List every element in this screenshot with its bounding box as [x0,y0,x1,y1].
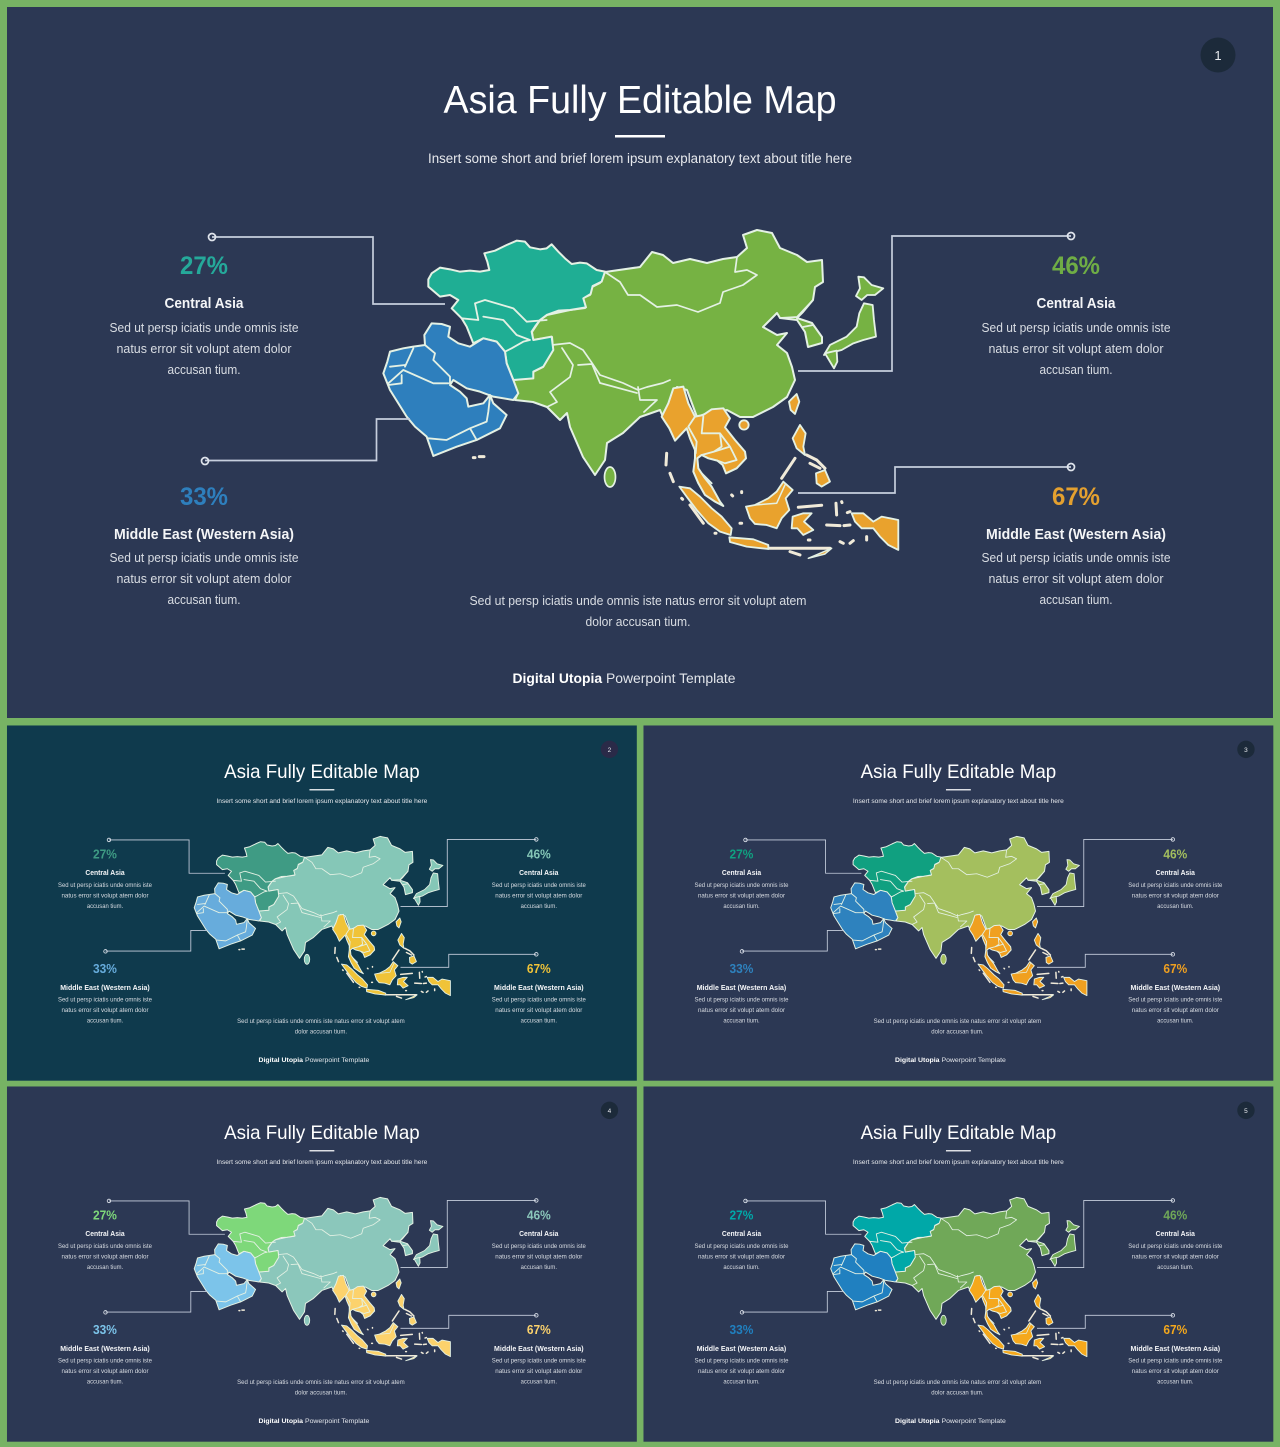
title: Asia Fully Editable Map [224,1123,420,1144]
slide number badge 1: 1 [1214,48,1222,63]
subtitle: Insert some short and brief lorem ipsum explanatory text about title here [853,1159,1064,1166]
bottom note [237,1379,405,1396]
block: Central Asia 27% [694,1208,789,1271]
block: Central Asia 46% [982,252,1170,377]
block: Central Asia 27%: accusan tium. [723,1264,760,1271]
slide number badge 2 [601,741,618,758]
block: Central Asia 27%: Central Asia [722,1229,762,1238]
block: Middle East 67%: accusan tium. [521,1378,557,1385]
block: Central Asia 46%: Central Asia [1156,1229,1196,1238]
block: Middle East 67%: 67% [527,1323,551,1337]
callout lines [104,838,538,967]
block: Middle East 33%: Sed ut persp iciatis unde omnis iste [58,997,152,1004]
block: Central Asia 27%: 27% [180,252,228,280]
block: Middle East 67% [1128,1323,1223,1385]
block: Central Asia 27%: Sed ut persp iciatis unde omnis iste [58,882,152,889]
slide number badge 3 [1237,741,1255,758]
block: Central Asia 46%: natus error sit volupt atem dolor [495,1254,583,1261]
callout line: bottom right [798,464,1074,493]
block: Middle East 33%: Sed ut persp iciatis unde omnis iste [58,1358,152,1365]
block: Central Asia 46%: Central Asia [519,1229,559,1238]
block: Central Asia 46%: 46% [1163,1208,1187,1222]
block: Central Asia 27%: natus error sit volupt atem dolor [116,341,292,356]
subtitle: Insert some short and brief lorem ipsum explanatory text about title here [216,1159,428,1166]
bottom note [470,593,806,629]
subtitle: Insert some short and brief lorem ipsum explanatory text about title here [853,798,1064,805]
title: Asia Fully Editable Map [444,79,836,122]
block: Middle East 33%: Middle East (Western Asia) [60,983,150,992]
block: Middle East 67%: 67% [1163,962,1187,976]
block: Central Asia 27%: natus error sit volupt atem dolor [698,893,786,900]
block: Central Asia 46%: accusan tium. [1157,1264,1194,1271]
block: Central Asia 46%: Sed ut persp iciatis unde omnis iste [492,882,586,889]
block: Central Asia 46%: natus error sit volupt atem dolor [988,341,1164,356]
block: Central Asia 27%: 27% [93,1208,117,1222]
block: Central Asia 46%: Sed ut persp iciatis unde omnis iste [982,320,1170,335]
block: Middle East 33%: natus error sit volupt atem dolor [698,1007,786,1014]
block: Middle East 33% [694,1323,789,1385]
block: Middle East 33%: Sed ut persp iciatis unde omnis iste [694,1358,789,1365]
callout line: top left [208,234,445,304]
block: Middle East 67%: Middle East (Western Asia) [1131,983,1221,992]
title underline [309,789,334,790]
block: Middle East 33%: natus error sit volupt atem dolor [116,571,292,586]
block: Central Asia 46%: accusan tium. [521,1264,557,1271]
footer: Digital Utopia Powerpoint Template [895,1057,1006,1064]
title: Asia Fully Editable Map [861,1123,1056,1144]
block: Central Asia 27%: Sed ut persp iciatis unde omnis iste [694,1243,789,1250]
block: Middle East 33%: Middle East (Western Asia) [114,526,294,543]
slide number badge 2: 2 [608,747,612,754]
bottom note: Sed ut persp iciatis unde omnis iste natus error sit volupt atem [874,1379,1041,1386]
title: Asia Fully Editable Map [861,762,1056,783]
block: Central Asia 46%: Sed ut persp iciatis unde omnis iste [1128,1243,1223,1250]
title underline [309,1150,334,1151]
block: Middle East 33%: accusan tium. [723,1017,760,1024]
block: Middle East 67%: natus error sit volupt atem dolor [495,1007,583,1014]
block: Central Asia 27%: accusan tium. [168,362,240,377]
block: Middle East 67%: natus error sit volupt atem dolor [988,571,1164,586]
map of Asia [383,230,898,558]
slide number badge 3: 3 [1244,747,1248,754]
block: Middle East 33%: natus error sit volupt atem dolor [61,1368,149,1375]
panel: slide 5 thumbnail [643,1086,1273,1442]
bottom note [874,1018,1041,1035]
block: Middle East 33%: accusan tium. [168,592,240,607]
block: Middle East 33%: Sed ut persp iciatis unde omnis iste [110,550,298,565]
block: Middle East 33% [58,1323,152,1385]
block: Middle East 33% [58,962,152,1024]
block: Middle East 67%: accusan tium. [1157,1378,1194,1385]
map of Asia [831,1197,1087,1361]
block: Middle East 33% [110,483,298,607]
block: Middle East 33%: Sed ut persp iciatis unde omnis iste [694,997,789,1004]
bottom note: Sed ut persp iciatis unde omnis iste natus error sit volupt atem [470,593,806,608]
footer: Digital Utopia Powerpoint Template [258,1057,370,1064]
bottom note: dolor accusan tium. [295,1389,347,1396]
title underline [946,789,971,790]
block: Middle East 67%: Sed ut persp iciatis unde omnis iste [982,550,1170,565]
block: Middle East 67%: Sed ut persp iciatis unde omnis iste [492,1358,586,1365]
block: Central Asia 46%: 46% [527,1208,551,1222]
block: Central Asia 46%: natus error sit volupt atem dolor [1132,893,1220,900]
block: Central Asia 27%: 27% [730,847,753,861]
slide number badge 4 [601,1102,618,1119]
block: Middle East 67%: accusan tium. [521,1017,557,1024]
block: Central Asia 46%: accusan tium. [1157,903,1194,910]
bottom note [874,1379,1041,1396]
block: Middle East 67%: Sed ut persp iciatis unde omnis iste [492,997,586,1004]
block: Central Asia 27%: Sed ut persp iciatis unde omnis iste [694,882,789,889]
block: Central Asia 27%: Central Asia [85,868,125,877]
block: Central Asia 46%: natus error sit volupt atem dolor [1132,1254,1220,1261]
block: Middle East 67%: Middle East (Western Asia) [986,526,1166,543]
block: Central Asia 27%: 27% [730,1208,753,1222]
block: Central Asia 46%: accusan tium. [1040,362,1112,377]
block: Central Asia 46% [1128,1208,1223,1271]
block: Central Asia 46%: 46% [527,847,551,861]
block: Central Asia 46%: natus error sit volupt atem dolor [495,893,583,900]
callout lines [740,1199,1175,1328]
block: Middle East 67%: 67% [527,962,551,976]
block: Middle East 67%: Sed ut persp iciatis unde omnis iste [1128,997,1223,1004]
map of Asia [831,836,1087,1000]
block: Central Asia 27%: accusan tium. [87,1264,123,1271]
block: Central Asia 27%: Central Asia [722,868,762,877]
block: Middle East 67% [492,962,586,1024]
subtitle: Insert some short and brief lorem ipsum explanatory text about title here [428,151,852,166]
block: Central Asia 46%: Central Asia [1156,868,1196,877]
block: Middle East 33%: accusan tium. [723,1378,760,1385]
bottom note: dolor accusan tium. [931,1389,984,1396]
block: Central Asia 27%: natus error sit volupt atem dolor [698,1254,786,1261]
block: Central Asia 27%: Central Asia [164,295,244,312]
block: Middle East 67%: natus error sit volupt atem dolor [1132,1007,1220,1014]
block: Middle East 67%: natus error sit volupt atem dolor [1132,1368,1220,1375]
block: Central Asia 27%: accusan tium. [723,903,760,910]
block: Middle East 67% [982,483,1170,607]
block: Central Asia 27%: 27% [93,847,117,861]
bottom note: Sed ut persp iciatis unde omnis iste natus error sit volupt atem [237,1018,405,1025]
block: Central Asia 46%: Sed ut persp iciatis unde omnis iste [492,1243,586,1250]
block: Middle East 33%: accusan tium. [87,1378,123,1385]
block: Middle East 33%: natus error sit volupt atem dolor [698,1368,786,1375]
block: Middle East 33%: accusan tium. [87,1017,123,1024]
block: Middle East 67%: 67% [1163,1323,1187,1337]
slide number badge 1 [1200,38,1236,72]
block: Central Asia 27% [110,252,298,377]
bottom note: dolor accusan tium. [586,614,690,629]
bottom note [237,1018,405,1035]
block: Middle East 67%: natus error sit volupt atem dolor [495,1368,583,1375]
bottom note: Sed ut persp iciatis unde omnis iste natus error sit volupt atem [237,1379,405,1386]
bottom note: Sed ut persp iciatis unde omnis iste natus error sit volupt atem [874,1018,1041,1025]
block: Central Asia 27%: Sed ut persp iciatis unde omnis iste [58,1243,152,1250]
block: Central Asia 46%: Central Asia [519,868,559,877]
bottom note: dolor accusan tium. [295,1028,347,1035]
footer: Digital Utopia Powerpoint Template [895,1418,1006,1425]
map of Asia [194,836,450,1000]
block: Middle East 33% [694,962,789,1024]
block: Central Asia 46%: Sed ut persp iciatis unde omnis iste [1128,882,1223,889]
block: Central Asia 46%: 46% [1052,252,1100,280]
block: Middle East 33%: 33% [730,962,753,976]
callout lines [104,1199,538,1328]
block: Middle East 33%: Middle East (Western Asia) [697,983,787,992]
title underline [946,1150,971,1151]
block: Middle East 67% [1128,962,1223,1024]
block: Middle East 33%: 33% [93,1323,117,1337]
block: Central Asia 46% [492,1208,586,1271]
block: Central Asia 46%: accusan tium. [521,903,557,910]
block: Central Asia 27%: natus error sit volupt atem dolor [61,1254,149,1261]
title: Asia Fully Editable Map [224,762,420,783]
block: Central Asia 27%: Central Asia [85,1229,125,1238]
block: Middle East 67%: accusan tium. [1157,1017,1194,1024]
block: Central Asia 46% [1128,847,1223,910]
block: Middle East 33%: Middle East (Western Asia) [60,1344,150,1353]
block: Central Asia 46% [492,847,586,910]
block: Central Asia 27%: natus error sit volupt atem dolor [61,893,149,900]
callout lines [740,838,1175,967]
block: Middle East 33%: 33% [180,483,228,511]
block: Middle East 67%: Sed ut persp iciatis unde omnis iste [1128,1358,1223,1365]
block: Central Asia 27% [58,847,152,910]
block: Central Asia 46%: 46% [1163,847,1187,861]
callout line: top right [798,232,1074,371]
slide number badge 5: 5 [1244,1108,1248,1115]
block: Middle East 33%: 33% [730,1323,753,1337]
footer: Digital Utopia Powerpoint Template [258,1418,370,1425]
block: Middle East 67%: 67% [1052,483,1100,511]
panel: slide 1 main map [7,7,1273,718]
callout line: bottom left [202,419,410,464]
block: Middle East 67%: Middle East (Western Asia) [494,983,584,992]
map of Asia [194,1197,450,1361]
block: Middle East 67% [492,1323,586,1385]
block: Middle East 33%: natus error sit volupt atem dolor [61,1007,149,1014]
panel: slide 2 thumbnail [7,725,637,1081]
block: Middle East 67%: Middle East (Western Asia) [494,1344,584,1353]
footer: Digital Utopia Powerpoint Template [512,671,736,686]
block: Middle East 33%: 33% [93,962,117,976]
block: Middle East 33%: Middle East (Western Asia) [697,1344,787,1353]
block: Central Asia 46%: Central Asia [1036,295,1116,312]
block: Central Asia 27%: Sed ut persp iciatis unde omnis iste [110,320,298,335]
slide number badge 5 [1237,1102,1255,1119]
block: Middle East 67%: Middle East (Western Asia) [1131,1344,1221,1353]
bottom note: dolor accusan tium. [931,1028,984,1035]
subtitle: Insert some short and brief lorem ipsum explanatory text about title here [216,798,428,805]
slide number badge 4: 4 [608,1108,612,1115]
block: Central Asia 27% [694,847,789,910]
block: Central Asia 27% [58,1208,152,1271]
block: Central Asia 27%: accusan tium. [87,903,123,910]
title underline [615,135,665,138]
panel: slide 4 thumbnail [7,1086,637,1442]
block: Middle East 67%: accusan tium. [1040,592,1112,607]
panel: slide 3 thumbnail [643,725,1273,1081]
